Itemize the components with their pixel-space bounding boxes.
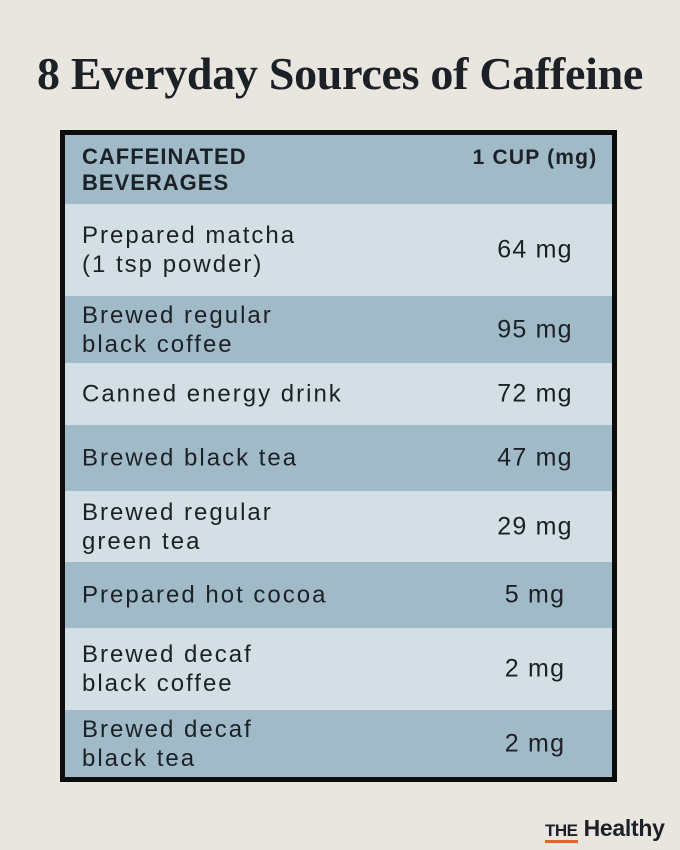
- row: cocoa: Prepared hot cocoa: [82, 582, 327, 608]
- row: coffee: Brewed regular: [82, 302, 273, 328]
- row: coffee: black coffee: [82, 330, 234, 358]
- row: matcha: 64 mg: [497, 236, 573, 264]
- row: decaf coffee: black coffee: [82, 670, 234, 697]
- row: decaf tea: black tea: [82, 744, 196, 772]
- row: decaf tea: 2 mg: [505, 729, 565, 757]
- row: decaf tea: [65, 710, 612, 777]
- row: matcha: (1 tsp powder): [82, 251, 263, 278]
- header row: [65, 135, 612, 204]
- row: green tea: 29 mg: [497, 512, 573, 540]
- row: decaf coffee: [65, 628, 612, 710]
- row: energy drink: Canned energy drink: [82, 380, 343, 408]
- row: coffee: [65, 296, 612, 363]
- header row: 1 CUP (mg): [473, 146, 597, 169]
- row: energy drink: [65, 363, 612, 425]
- title: 8 Everyday Sources of Caffeine: [37, 48, 643, 99]
- row: black tea: [65, 425, 612, 491]
- row: energy drink: 72 mg: [497, 380, 573, 408]
- row: coffee: 95 mg: [497, 315, 573, 343]
- row: decaf coffee: Brewed decaf: [82, 641, 253, 668]
- header row: BEVERAGES: [82, 170, 229, 194]
- row: black tea: Brewed black tea: [82, 444, 298, 472]
- header row: CAFFEINATED: [82, 144, 247, 168]
- row: matcha: Prepared matcha: [82, 222, 296, 249]
- logo: THE Healthy: [545, 815, 665, 841]
- table: [60, 130, 617, 782]
- row: matcha: [65, 204, 612, 296]
- row: decaf tea: Brewed decaf: [82, 716, 253, 742]
- row: cocoa: [65, 562, 612, 628]
- row: green tea: [65, 491, 612, 562]
- row: decaf coffee: 2 mg: [505, 654, 565, 682]
- row: green tea: green tea: [82, 528, 201, 554]
- row: cocoa: 5 mg: [505, 580, 565, 608]
- row: green tea: Brewed regular: [82, 498, 273, 526]
- row: black tea: 47 mg: [497, 444, 573, 472]
